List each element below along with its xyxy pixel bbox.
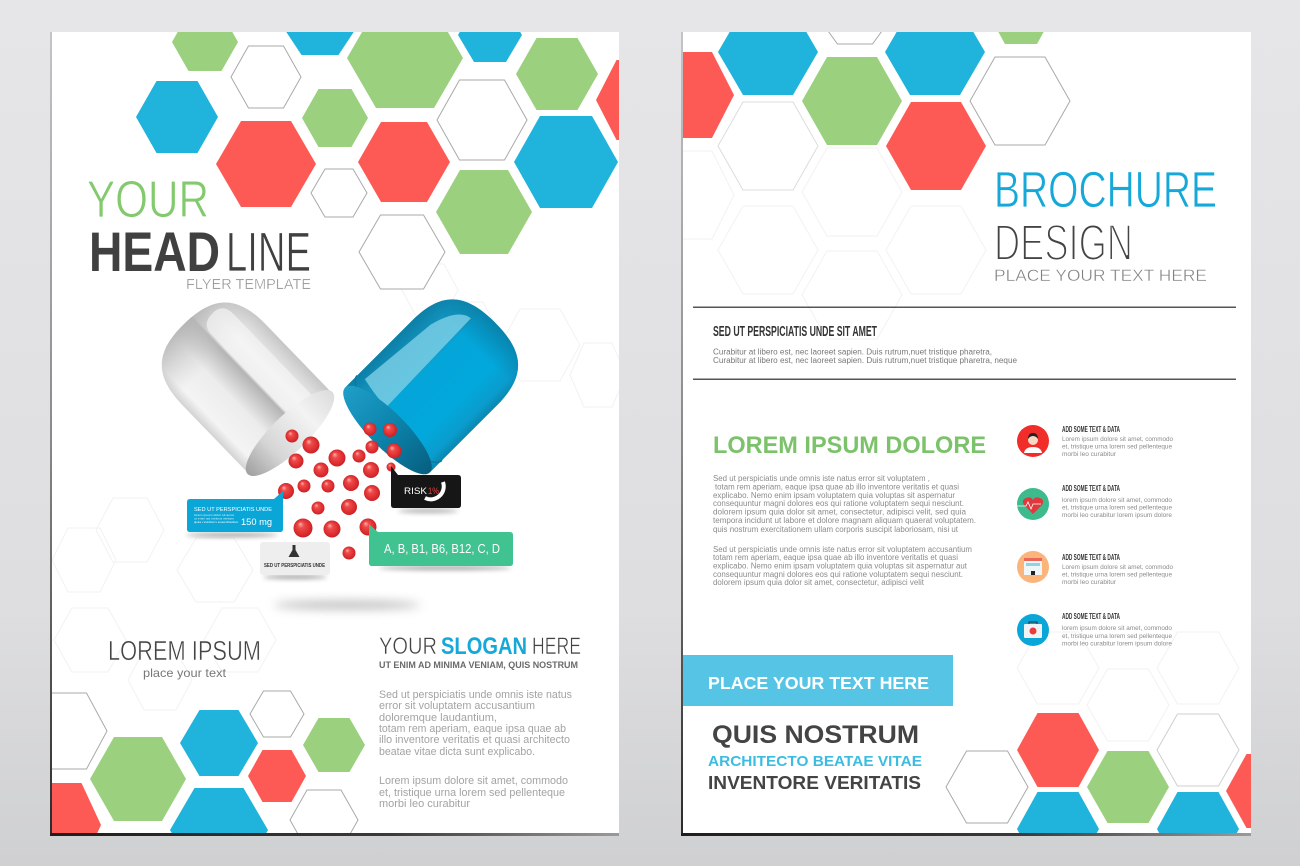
list item: heart: et, tristique urna lorem sed pellenteque bbox=[1062, 504, 1172, 512]
callout: dosage bbox=[186, 491, 283, 537]
text block: main body: consequuntur magni dolores eos qui ratione voluptatem sequi nesciunt. bbox=[713, 499, 964, 508]
callout: dosage: lorem ipsum dolor sit amet bbox=[194, 513, 234, 517]
text block: main body: quis nostrum exercitationem ullam corporis suscipit laboriosam, nisi ut bbox=[713, 525, 959, 534]
list item: medical kit bbox=[1017, 612, 1172, 648]
callout: dosage: 150 mg bbox=[241, 517, 272, 528]
list item: hospital: et, tristique urna lorem sed pellenteque bbox=[1062, 572, 1172, 578]
title: your headline: YOUR bbox=[87, 171, 209, 229]
list item: doctor: et, tristique urna lorem sed pellenteque bbox=[1062, 444, 1172, 450]
heading: your slogan here: YOUR bbox=[379, 633, 437, 660]
text block: main body: totam rem aperiam, eaque ipsa quae ab illo inventore veritatis et quasi bbox=[713, 553, 958, 562]
list item: medical kit: lorem ipsum dolore sit amet, commodo bbox=[1062, 625, 1172, 632]
callout: dosage: quis nostrum exercitation bbox=[194, 520, 239, 524]
banner: place your text here: PLACE YOUR TEXT HERE bbox=[708, 673, 929, 693]
text block: slogan body: Sed ut perspiciatis unde omnis iste natus bbox=[379, 689, 572, 701]
text block: closing lines bbox=[708, 721, 922, 793]
list item: heart: morbi leo curabitur lorem ipsum dolore bbox=[1062, 512, 1172, 519]
panel: left flyer page bbox=[50, 32, 619, 836]
text block: slogan body: error sit voluptatem accusantium bbox=[379, 700, 535, 712]
section: intro strip: Curabitur at libero est, nec laoreet sapien. Duis rutrum,nuet tristique pharetra, neque bbox=[713, 356, 1018, 365]
decorative faint hexagons left bbox=[52, 264, 626, 710]
callout: flask: SED UT PERSPICIATIS UNDE bbox=[264, 563, 325, 569]
heading: your slogan here: UT ENIM AD MINIMA VENIAM, QUIS NOSTRUM bbox=[379, 660, 578, 670]
text block: slogan body: doloremque laudantium, bbox=[379, 712, 497, 724]
callout: risk: 1% bbox=[428, 486, 439, 497]
text block: main body: explicabo. Nemo enim ipsam voluptatem quia voluptas sit aspernatur bbox=[713, 491, 955, 500]
text block: closing lines: QUIS NOSTRUM bbox=[712, 721, 919, 749]
list item: heart: ADD SOME TEXT & DATA bbox=[1062, 484, 1120, 493]
list item: hospital bbox=[1017, 551, 1173, 586]
list item: medical kit: et, tristique urna lorem sed pellenteque bbox=[1062, 633, 1172, 640]
callout: vitamins bbox=[369, 524, 513, 570]
list item: medical kit: morbi leo curabitur lorem ipsum dolore bbox=[1062, 640, 1172, 648]
list item: hospital: morbi leo curabitur bbox=[1062, 579, 1117, 586]
flask icon bbox=[288, 545, 300, 557]
callout: risk: RISK bbox=[404, 486, 428, 497]
text block: main body bbox=[713, 474, 976, 587]
heading: your slogan here: HERE bbox=[532, 633, 581, 660]
heading: your slogan here: SLOGAN bbox=[441, 633, 527, 660]
heading: lorem ipsum bbox=[108, 635, 261, 680]
title: your headline: HEAD bbox=[89, 220, 220, 283]
callout: risk bbox=[391, 466, 461, 513]
heading: lorem ipsum: LOREM IPSUM bbox=[108, 635, 261, 666]
text block: main body: explicabo. Nemo enim ipsam voluptatem quia voluptas sit aspernatur aut bbox=[713, 562, 968, 570]
text block: slogan body bbox=[379, 689, 572, 810]
heading: your slogan here bbox=[379, 633, 581, 670]
text block: slogan body: morbi leo curabitur bbox=[379, 798, 470, 810]
title: your headline bbox=[87, 171, 311, 293]
illustration: capsule bbox=[142, 280, 537, 609]
title: brochure design bbox=[994, 161, 1217, 285]
text block: slogan body: et, tristique urna lorem sed pellenteque bbox=[379, 787, 565, 799]
white capsule half bbox=[142, 283, 345, 487]
hexagons: top cluster bbox=[683, 32, 1070, 190]
title: brochure design: PLACE YOUR TEXT HERE bbox=[994, 266, 1207, 285]
text block: main body: dolorem ipsum quia dolor sit amet, consectetur, adipisci velit bbox=[713, 578, 925, 587]
list item: heart: lorem ipsum dolore sit amet, commodo bbox=[1062, 497, 1172, 504]
text block: main body: consequuntur magni dolores eos qui ratione voluptatem sequi nesciunt. bbox=[713, 570, 963, 579]
gauge icon bbox=[425, 482, 444, 499]
title: your headline: FLYER TEMPLATE bbox=[186, 276, 311, 293]
banner: place your text here bbox=[683, 655, 953, 706]
callout: dosage: ut enim ad minima veniam bbox=[194, 516, 234, 520]
list item: medical kit: ADD SOME TEXT & DATA bbox=[1062, 612, 1120, 621]
list item: heart bbox=[1017, 484, 1172, 520]
section: intro strip: SED UT PERSPICIATIS UNDE SIT AMET bbox=[713, 324, 877, 340]
blue capsule half bbox=[332, 280, 537, 485]
callout: flask bbox=[260, 542, 330, 579]
heading: lorem ipsum dolore: LOREM IPSUM DOLORE bbox=[713, 432, 986, 459]
heading: lorem ipsum: place your text bbox=[143, 666, 227, 680]
callout: vitamins: A, B, B1, B6, B12, C, D bbox=[384, 542, 500, 556]
text block: main body: Sed ut perspiciatis unde omnis iste natus error sit voluptatem , bbox=[713, 474, 930, 483]
list item: doctor: Lorem ipsum dolore sit amet, commodo bbox=[1062, 436, 1173, 443]
section: intro strip bbox=[693, 306, 1236, 380]
list item: doctor: ADD SOME TEXT & DATA bbox=[1062, 425, 1120, 434]
hexagons: bottom cluster bbox=[946, 713, 1251, 833]
text block: closing lines: ARCHITECTO BEATAE VITAE bbox=[708, 753, 922, 770]
text block: main body: totam rem aperiam, eaque ipsa quae ab illo inventore veritatis et quasi bbox=[715, 482, 959, 492]
text block: closing lines: INVENTORE VERITATIS bbox=[708, 773, 921, 793]
list item: doctor bbox=[1017, 425, 1173, 458]
text block: slogan body: Lorem ipsum dolore sit amet, commodo bbox=[379, 775, 568, 787]
section: intro strip: Curabitur at libero est, nec laoreet sapien. Duis rutrum,nuet tristique pharetra, bbox=[713, 348, 992, 356]
pill granules bbox=[278, 422, 402, 560]
panel: right brochure page bbox=[681, 32, 1251, 836]
list item: hospital: ADD SOME TEXT & DATA bbox=[1062, 553, 1120, 562]
text block: main body: Sed ut perspiciatis unde omnis iste natus error sit voluptatem accusantium bbox=[713, 545, 972, 554]
text block: main body: dolorem ipsum quia dolor sit amet, consectetur, adipisci velit, sed quia bbox=[713, 508, 967, 516]
hexagons: top cluster bbox=[136, 32, 619, 290]
callout: dosage: SED UT PERSPICIATIS UNDE bbox=[194, 507, 272, 513]
title: your headline: LINE bbox=[226, 220, 311, 283]
decorative faint hexagons right bbox=[646, 148, 1239, 741]
list item: hospital: Lorem ipsum dolore sit amet, commodo bbox=[1062, 564, 1173, 571]
hexagons: bottom cluster bbox=[52, 690, 365, 833]
text block: slogan body: totam rem aperiam, eaque ipsa quae ab bbox=[379, 723, 566, 735]
title: brochure design: DESIGN bbox=[994, 214, 1133, 271]
text block: main body: tempora incidunt ut labore et dolore magnam aliquam quaerat voluptatem. bbox=[713, 516, 976, 525]
title: brochure design: BROCHURE bbox=[994, 161, 1217, 218]
list item: doctor: morbi leo curabitur bbox=[1062, 451, 1117, 458]
text block: slogan body: illo inventore veritatis et quasi architecto bbox=[379, 734, 570, 746]
text block: slogan body: beatae vitae dicta sunt explicabo. bbox=[379, 746, 535, 758]
floor shadow bbox=[273, 601, 421, 609]
